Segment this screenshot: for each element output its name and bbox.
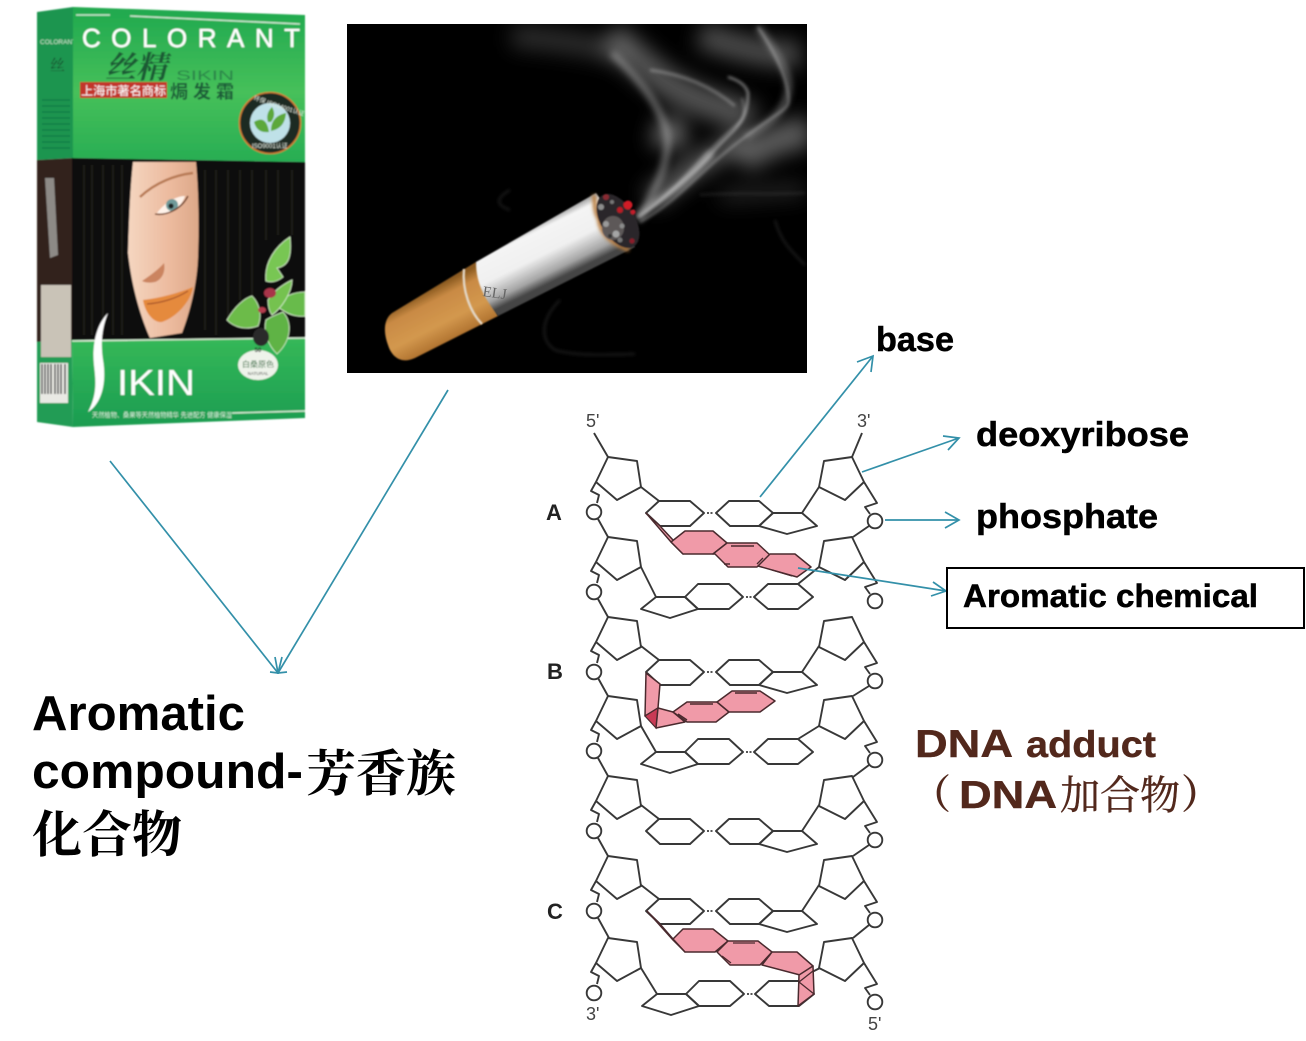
panel letters: [546, 500, 563, 924]
shade badge: 白桑原色: [242, 359, 274, 369]
label: DNA adduct: DNA: [959, 774, 1057, 817]
strand end labels: 5': [586, 411, 599, 431]
ISO seal: 环保 ISO14001认证: [253, 94, 305, 118]
box side panel: 丝: [50, 57, 65, 74]
diagram: DNA double helix with adducts: [546, 411, 882, 1034]
heading: aromatic compound: 化合物: [32, 807, 182, 863]
barcode: [40, 363, 68, 403]
cigarette paper: [476, 193, 635, 316]
model face: [128, 162, 199, 338]
box bottom slogan: 天然植物、桑果等天然植物精华 先进配方 健康保湿: [92, 410, 232, 419]
burning ember: [590, 192, 640, 254]
right backbone: [819, 433, 882, 1009]
SIKIN logo: [88, 313, 195, 412]
label: DNA adduct: （: [911, 772, 951, 817]
panel letters: C: [547, 899, 563, 924]
panel letters: B: [547, 659, 563, 684]
label: phosphate: phosphate: [976, 498, 1158, 536]
box side panel: [37, 7, 76, 427]
cigarette filter: [385, 262, 498, 360]
box front bottom band: [72, 338, 305, 427]
heading: aromatic compound: compound-: [32, 745, 303, 799]
panel letters: A: [546, 500, 562, 525]
mulberry leaves: [227, 237, 305, 354]
shade badge: NATURAL: [248, 371, 269, 376]
photo: hair colorant box: [37, 7, 305, 427]
arrow: deoxyribose: [862, 436, 959, 472]
filter band: [464, 269, 482, 324]
box brand text: 丝精 SIKIN: SIKIN: [176, 67, 234, 83]
strand end labels: 3': [857, 411, 870, 431]
strand end labels: 5': [868, 1014, 881, 1034]
shade badge: [238, 348, 278, 380]
strand end labels: 3': [586, 1004, 599, 1024]
arrow: phosphate: [885, 512, 959, 528]
label: DNA adduct: ）: [1181, 772, 1221, 817]
base pairs: [641, 487, 820, 1015]
label: DNA adduct: [911, 723, 1221, 818]
adduct C (pink): [647, 911, 814, 1006]
product name: 焗发霜: [170, 81, 234, 102]
soft smoke strands: [612, 27, 789, 220]
box brand text: 丝精 SIKIN: [105, 50, 234, 85]
shade badge: 50: [255, 348, 262, 354]
thin smoke strands: [499, 27, 805, 355]
arrow: base: [760, 356, 873, 497]
box brand text: COLORANT: COLORANT: [82, 23, 300, 53]
hair panel: [72, 158, 305, 340]
heading: aromatic compound: Aromatic: [32, 687, 245, 741]
heading: aromatic compound: 芳香族: [306, 746, 456, 802]
box front top band: [73, 7, 305, 162]
arrow: aromatic chemical: [798, 568, 946, 596]
cigarette logo: ELJ: [482, 284, 508, 303]
ISO seal: [240, 92, 305, 154]
SIKIN logo: IKIN: [117, 362, 195, 403]
box side panel: COLORANT: [40, 39, 76, 46]
label: deoxyribose: deoxyribose: [976, 416, 1189, 454]
arrow: hair dye to aromatic compound: [110, 461, 278, 673]
left backbone: [587, 433, 641, 1000]
callout: aromatic chemical: [947, 568, 1304, 628]
adduct B (pink): [645, 673, 775, 728]
red trademark label: 上海市著名商标: [81, 83, 166, 98]
diffuse smoke: [512, 35, 810, 200]
label: DNA adduct: DNA: [915, 723, 1013, 766]
photo: burning cigarette with smoke: [347, 24, 810, 373]
label: DNA adduct: 加合物: [1060, 773, 1180, 818]
callout: aromatic chemical: Aromatic chemical: [963, 578, 1258, 614]
label: DNA adduct: adduct: [1026, 724, 1156, 765]
heading: aromatic compound: [32, 687, 456, 863]
ISO seal: ISO9001认证: [252, 142, 288, 150]
box brand text: 丝精 SIKIN: 丝精: [105, 50, 172, 85]
adduct A (pink): [646, 513, 811, 577]
label: base: base: [876, 321, 954, 359]
strand end labels: [586, 411, 881, 1034]
arrow: cigarette to aromatic compound: [278, 390, 448, 673]
